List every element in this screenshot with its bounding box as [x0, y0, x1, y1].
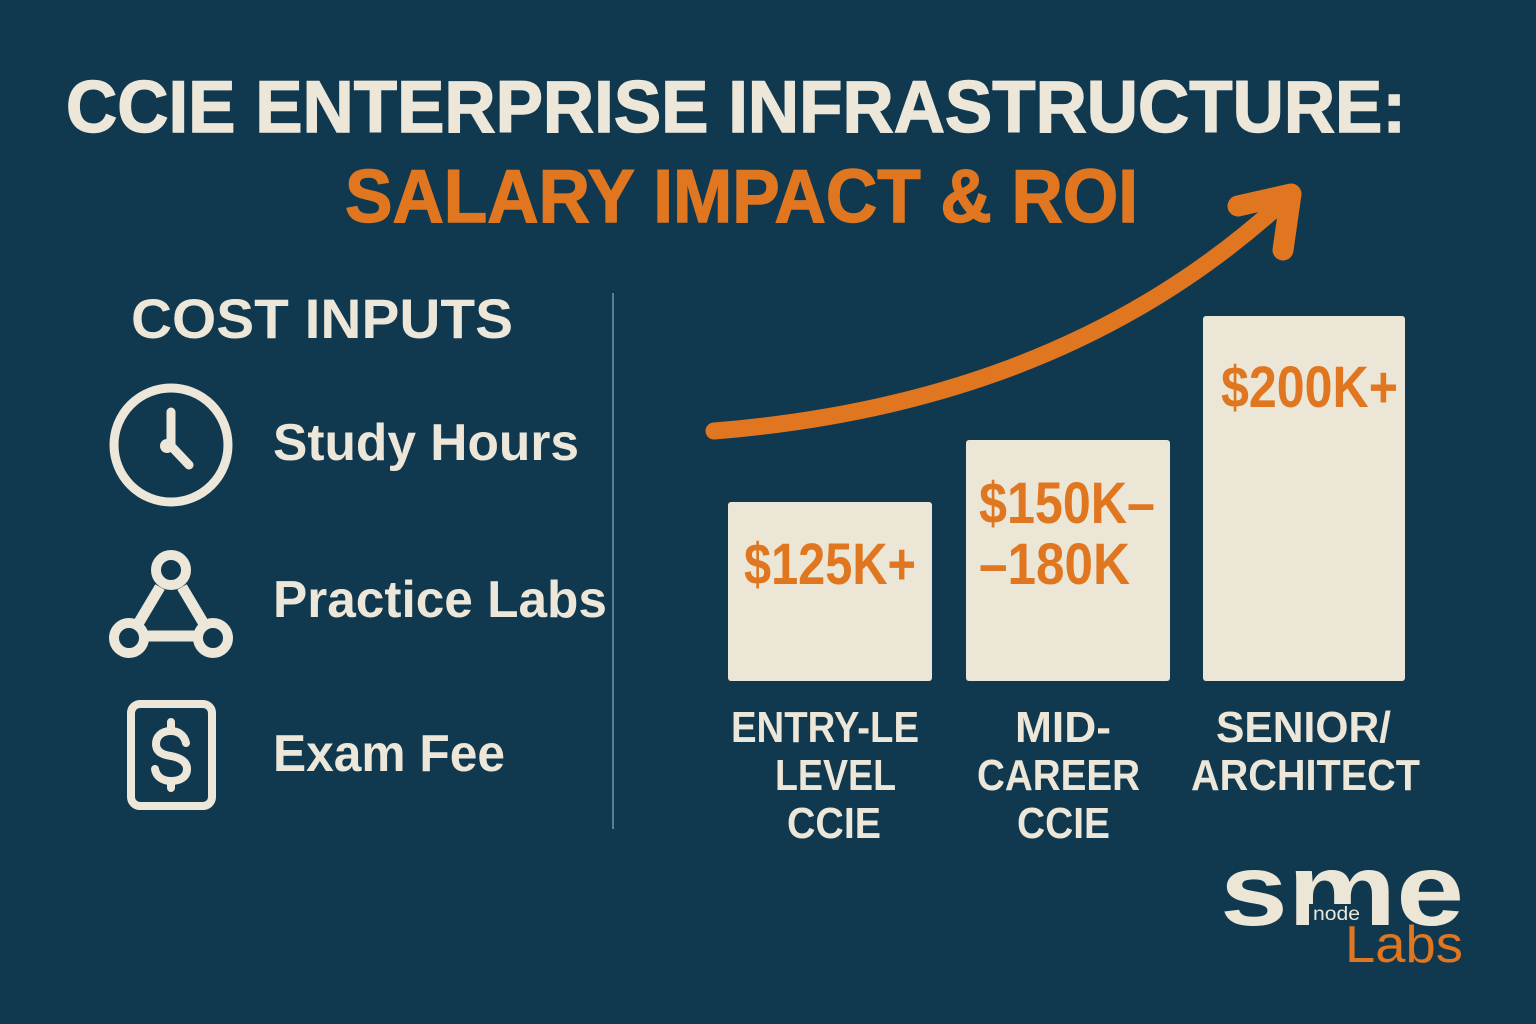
label: practice labs: Practice Labs: [273, 571, 607, 629]
icon: exam fee: [131, 704, 212, 806]
icon: clock: [114, 388, 228, 502]
label: study hours: Study Hours: [273, 414, 579, 472]
icon: network triangle: [114, 555, 228, 653]
label: mid career ccie: MID-: [1015, 703, 1111, 752]
label: entry level ccie: LEVEL: [775, 751, 896, 800]
label: entry level ccie: ENTRY-LE: [731, 703, 919, 752]
title: SALARY IMPACT & ROI: [345, 154, 1138, 238]
bar: mid career: $150K–: [979, 471, 1155, 536]
divider: [612, 293, 614, 829]
heading: cost inputs: COST INPUTS: [131, 287, 513, 350]
label: senior architect: SENIOR/: [1216, 703, 1391, 752]
bar: entry level: $125K+: [744, 532, 916, 597]
label: exam fee: Exam Fee: [273, 725, 505, 783]
label: mid career ccie: CCIE: [1017, 799, 1110, 848]
logo: sme node labs: [1220, 833, 1464, 974]
logo: sme node labs: sme: [1220, 833, 1464, 947]
bar: entry level: [728, 502, 932, 681]
label: senior architect: [1191, 703, 1420, 800]
title: CCIE ENTERPRISE INFRASTRUCTURE:: [66, 67, 1406, 148]
bar: mid career: [966, 440, 1170, 681]
label: entry level ccie: CCIE: [787, 799, 881, 848]
title: [66, 67, 1406, 238]
label: entry level ccie: [731, 703, 919, 848]
bar: senior architect: [1203, 316, 1405, 681]
growth arrow: [714, 194, 1291, 431]
logo: sme node labs: node: [1313, 904, 1360, 925]
bar: mid career: –180K: [979, 532, 1130, 597]
label: senior architect: ARCHITECT: [1191, 751, 1420, 800]
label: mid career ccie: [977, 703, 1140, 848]
logo: sme node labs: Labs: [1345, 916, 1463, 974]
bar: senior architect: $200K+: [1221, 355, 1398, 420]
label: mid career ccie: CAREER: [977, 751, 1140, 800]
